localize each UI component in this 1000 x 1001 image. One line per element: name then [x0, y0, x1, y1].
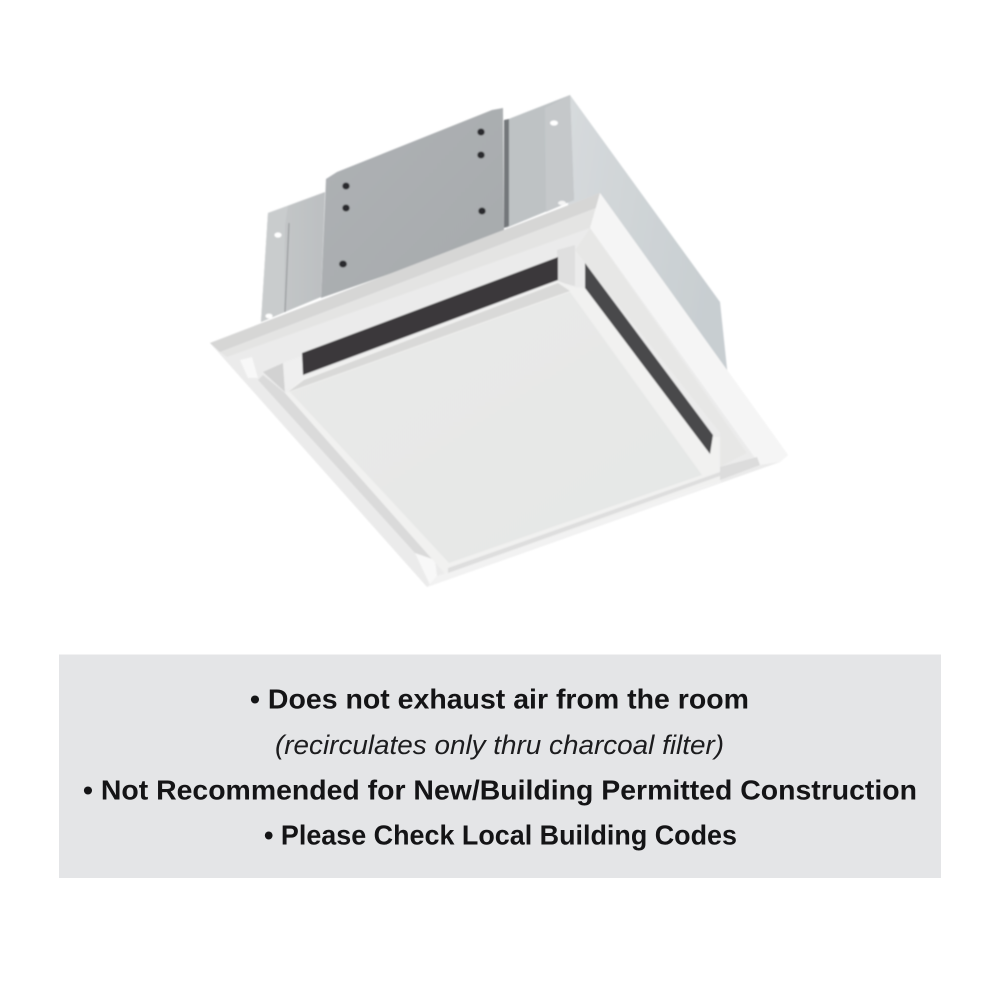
right charcoal slot [585, 263, 713, 454]
top charcoal slot [302, 257, 558, 375]
channel corner blocks [240, 356, 437, 585]
bullet: does not exhaust: • Does not exhaust air from the room [250, 684, 749, 714]
grille frame base [210, 193, 788, 587]
top moulding [210, 193, 600, 357]
info panel [59, 654, 941, 878]
left mounting flange [261, 192, 325, 322]
front panel [290, 292, 702, 563]
centre galvanised plate [321, 108, 504, 298]
right recess [575, 228, 747, 467]
bullet: building codes: • Please Check Local Building Codes [264, 820, 737, 850]
panel background [59, 654, 941, 878]
right mounting flange [504, 95, 574, 228]
note: recirculates: (recirculates only thru charcoal filter) [275, 730, 724, 760]
channel along left side [258, 375, 447, 568]
housing side wall [568, 95, 728, 378]
plate mounting holes [339, 128, 486, 268]
bullet: not recommended: • Not Recommended for New/Building Permitted Construction [83, 774, 917, 806]
product illustration: ceiling fan housing and grille [210, 95, 788, 587]
lower rim lines [427, 480, 722, 587]
right moulding [590, 193, 788, 465]
panel rim [285, 281, 720, 576]
post between slots [557, 245, 575, 286]
